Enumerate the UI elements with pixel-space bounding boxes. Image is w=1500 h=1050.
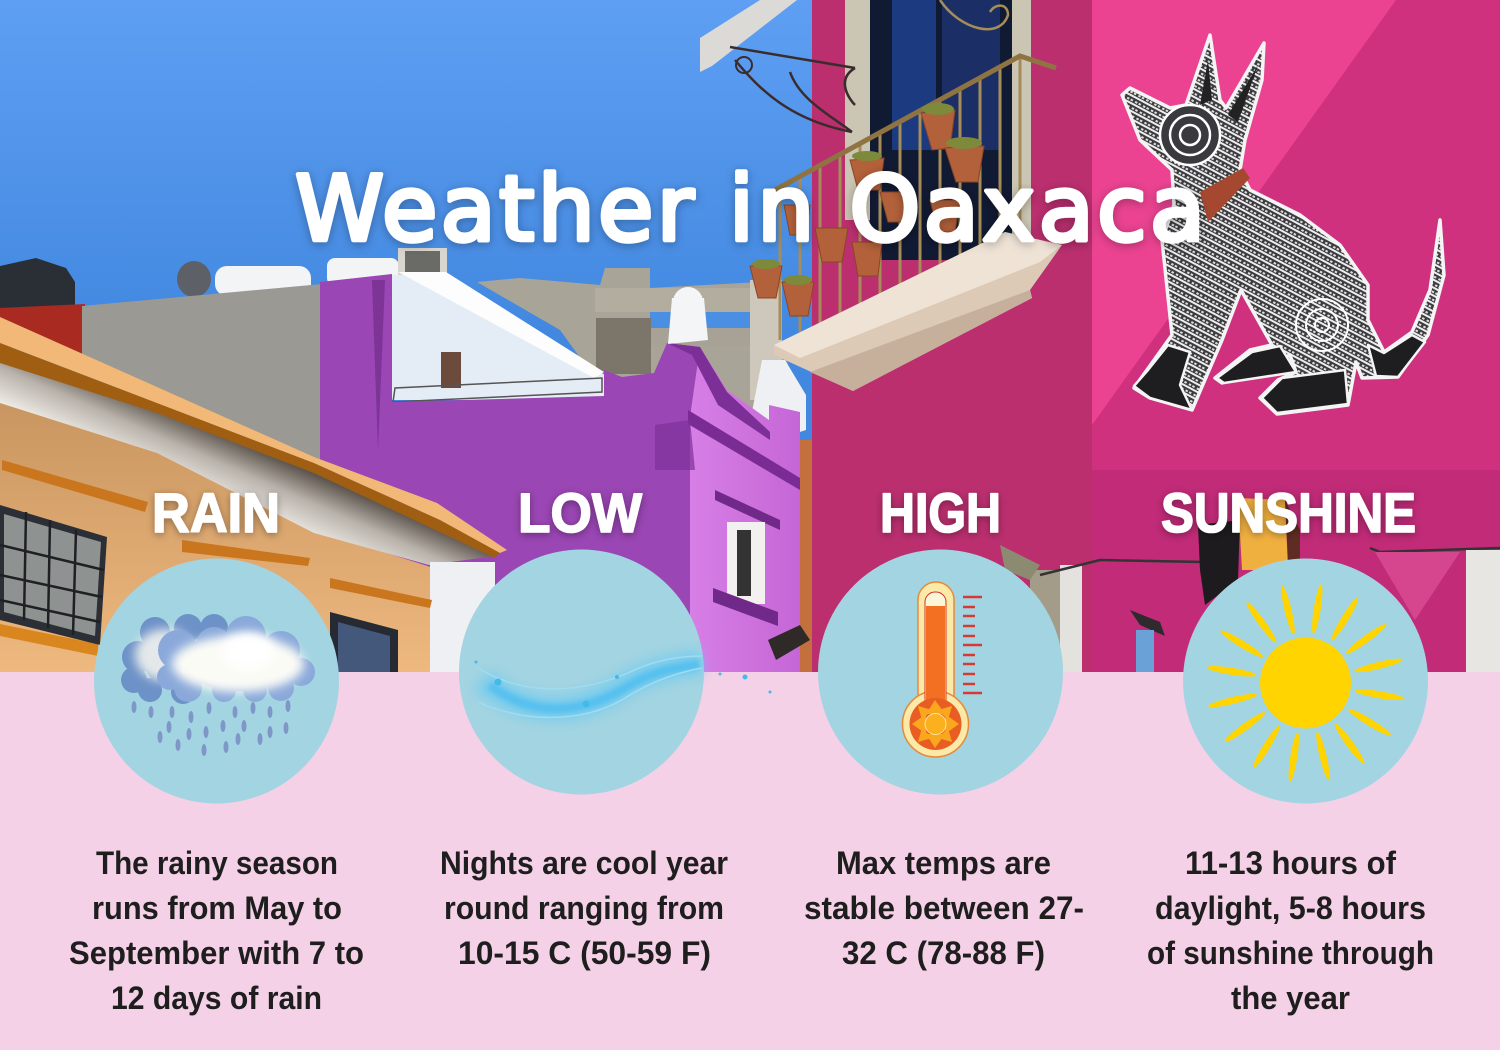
- dog paws: [1134, 335, 1425, 413]
- pink wall left section: [812, 0, 1094, 672]
- column: high: [804, 481, 1084, 971]
- grey background building: [477, 268, 806, 440]
- icon: wind: [474, 656, 772, 717]
- text: rain description: [69, 845, 364, 1016]
- icon: sun: [1206, 584, 1405, 782]
- text: low description: [440, 845, 728, 971]
- text: sunshine description: daylight, 5-8 hours: [1155, 890, 1426, 926]
- lower wall fixtures: column, traffic light, wires: [768, 498, 1500, 672]
- title: Weather in Oaxaca: [295, 157, 1205, 262]
- white building: [390, 272, 605, 402]
- column: sunshine: [1147, 481, 1434, 1016]
- rooftop water tanks and dish: [0, 248, 447, 312]
- balcony railing with flowerpots: [750, 56, 1056, 340]
- column: rain: [69, 481, 364, 1016]
- text: sunshine description: 11-13 hours of: [1185, 845, 1396, 881]
- circle: rain: [94, 558, 339, 804]
- text: rain description: runs from May to: [92, 890, 342, 926]
- text: sunshine description: [1147, 845, 1434, 1016]
- background photo: colourful Oaxaca street: [0, 0, 1500, 672]
- text: low description: round ranging from: [444, 890, 724, 926]
- text: high description: 32 C (78-88 F): [842, 935, 1045, 971]
- pink wall right section with diagonal shadow: [1092, 0, 1500, 672]
- heading: high: HIGH: [880, 481, 1001, 544]
- column: low: [440, 481, 772, 971]
- text: low description: 10-15 C (50-59 F): [458, 935, 711, 971]
- dog collar: [1200, 168, 1250, 222]
- text: high description: Max temps are: [836, 845, 1051, 881]
- heading: rain: RAIN: [152, 481, 280, 544]
- concrete wall: [82, 284, 322, 480]
- red wall: [0, 304, 85, 360]
- circle: high: [818, 550, 1063, 794]
- text: high description: stable between 27-: [804, 890, 1084, 926]
- text: rain description: The rainy season: [96, 845, 338, 881]
- text: low description: Nights are cool year: [440, 845, 728, 881]
- sky: [0, 0, 820, 672]
- text: rain description: 12 days of rain: [111, 980, 322, 1016]
- heading: sunshine: SUNSHINE: [1161, 481, 1416, 544]
- text: sunshine description: the year: [1231, 980, 1350, 1016]
- circle: sunshine: [1183, 558, 1428, 804]
- text: sunshine description: of sunshine through: [1147, 935, 1434, 971]
- dog ears dark centre: [1200, 60, 1258, 122]
- balcony stone base: [774, 232, 1062, 391]
- icon: rain cloud: [121, 614, 315, 756]
- wrought-iron bracket and awning: [700, 0, 1008, 132]
- icon: thermometer: [902, 582, 982, 757]
- text: high description: [804, 845, 1084, 971]
- window and stone frame: [845, 0, 1031, 260]
- circle: low: [459, 550, 704, 794]
- orange house: [0, 317, 507, 672]
- dog head spiral: [1160, 105, 1220, 165]
- alebrije dog mural: [1122, 35, 1444, 414]
- dog haunch spiral: [1296, 299, 1348, 351]
- purple building: [320, 274, 813, 672]
- text: rain description: September with 7 to: [69, 935, 364, 971]
- pink lower panel: [0, 672, 1500, 1050]
- heading: low: LOW: [518, 481, 642, 544]
